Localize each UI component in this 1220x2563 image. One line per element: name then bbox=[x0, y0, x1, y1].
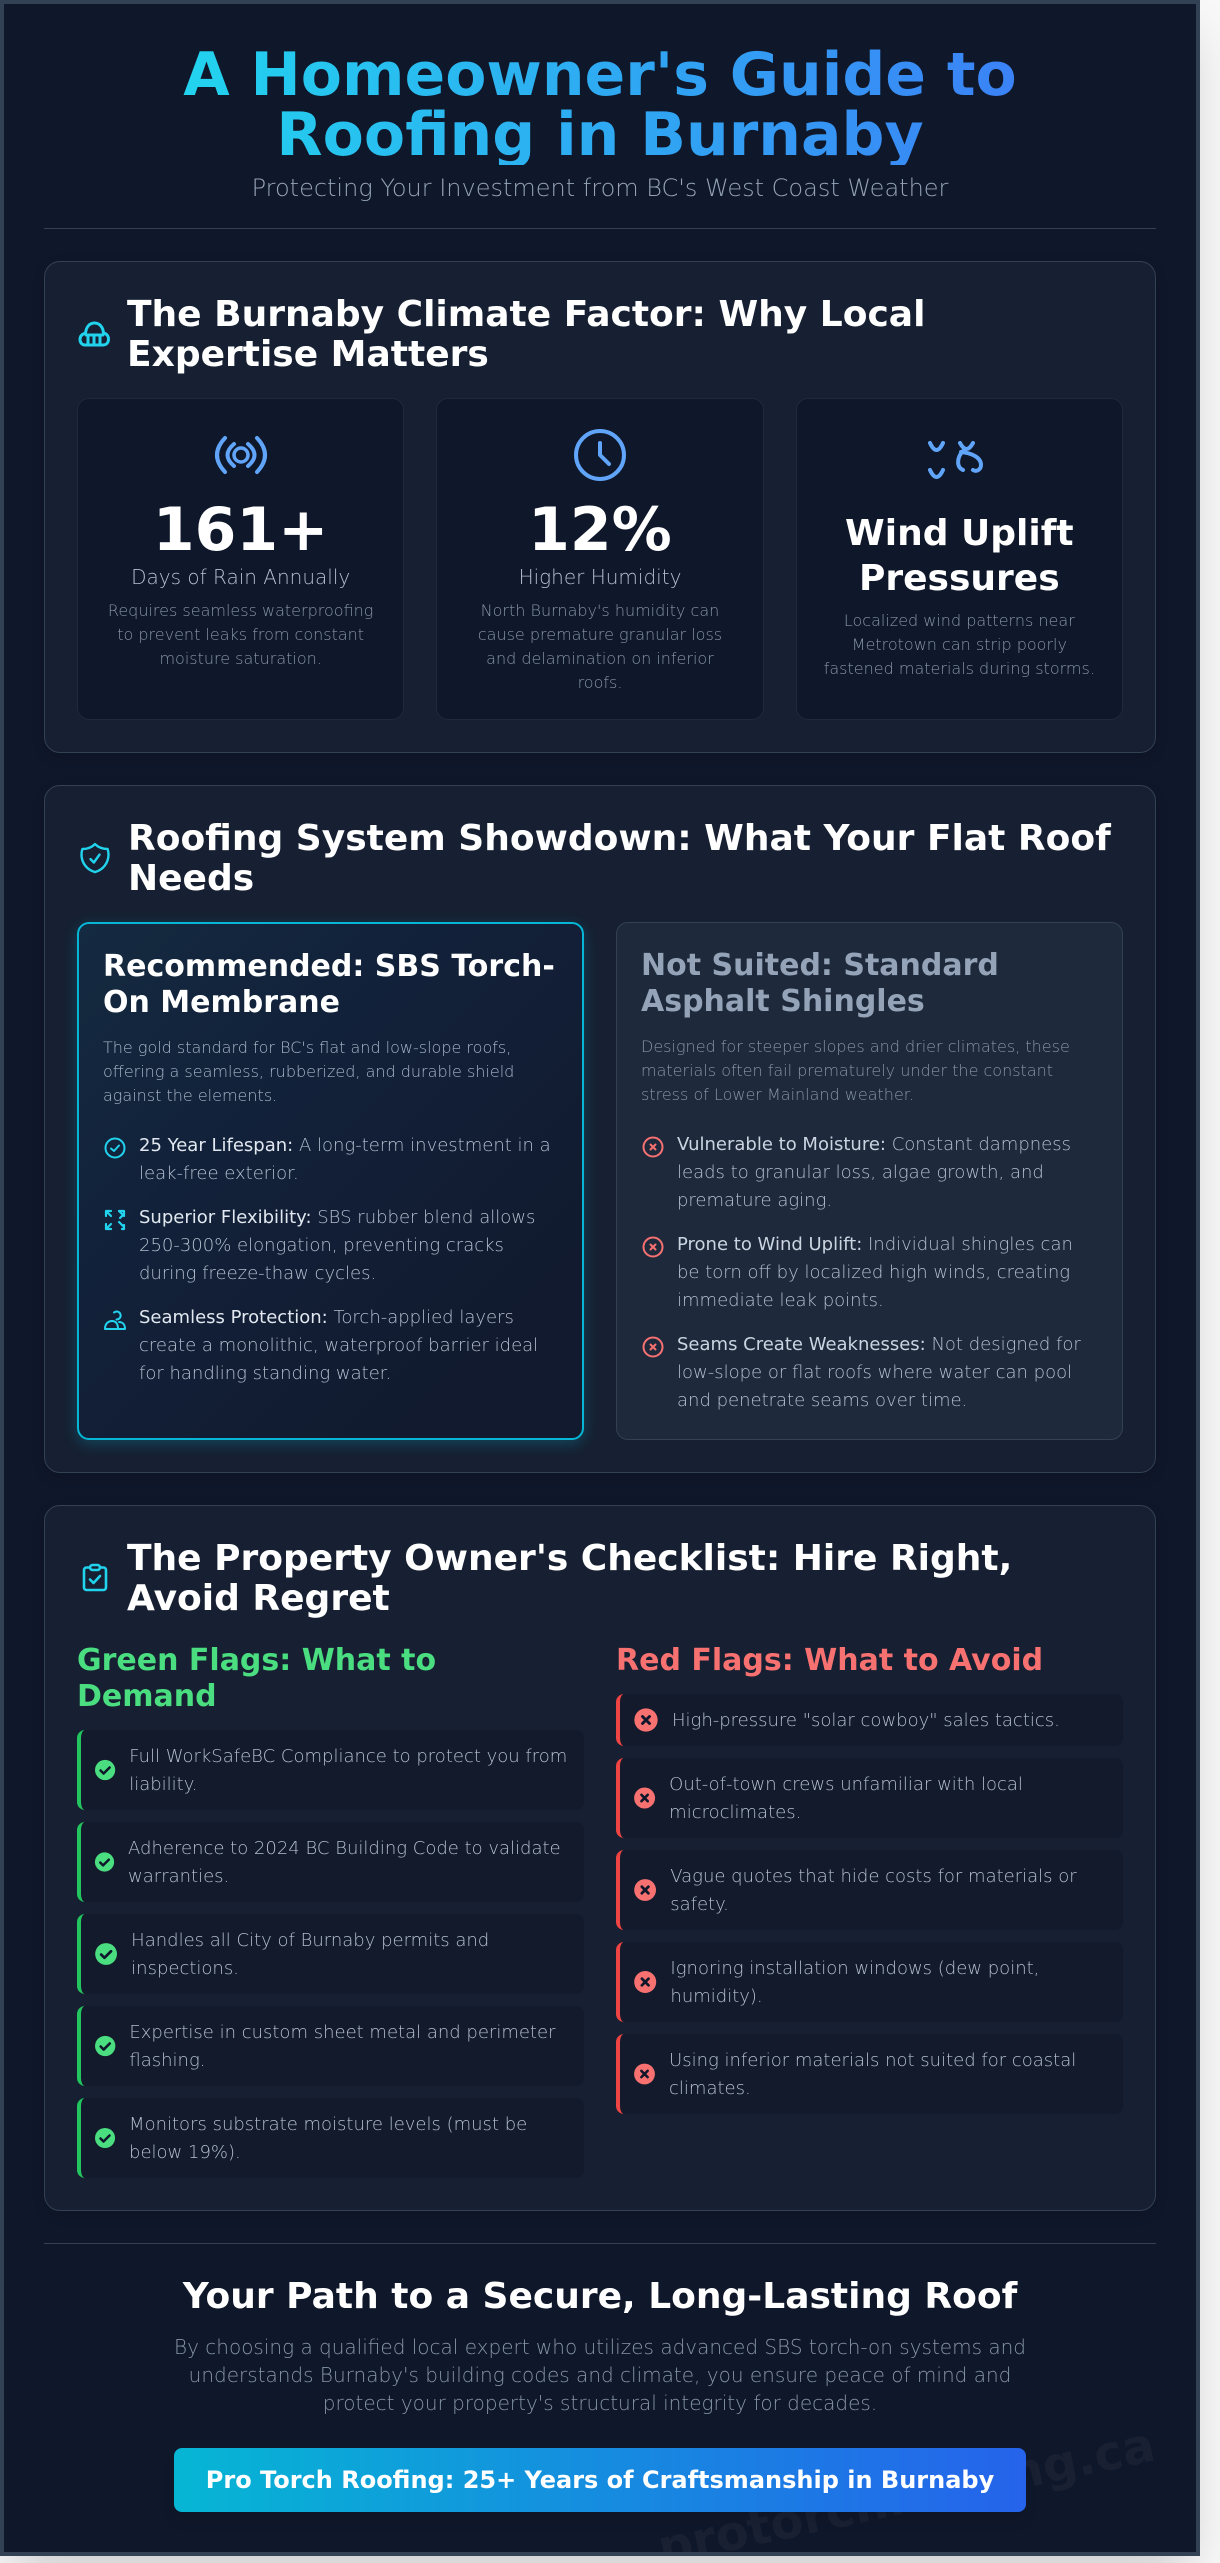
card description: Designed for steeper slopes and drier climates, these bbox=[641, 1037, 1070, 1056]
footer paragraph bbox=[174, 2335, 1026, 2415]
icon: signal bbox=[214, 436, 268, 474]
footer paragraph: protect your property's structural integrity for decades. bbox=[323, 2391, 877, 2415]
feature list bbox=[104, 1135, 551, 1384]
stat description: roofs. bbox=[578, 673, 622, 692]
stat value: 12% bbox=[528, 495, 672, 565]
section heading: climate bbox=[78, 294, 925, 375]
card: not suited bbox=[616, 922, 1123, 1440]
card description: materials often fail prematurely under the constant bbox=[641, 1061, 1053, 1080]
stat label: Days of Rain Annually bbox=[131, 565, 350, 589]
header bbox=[44, 44, 1156, 229]
feature: lifespan bbox=[104, 1135, 551, 1184]
card heading: Not Suited: Standard bbox=[641, 948, 999, 983]
drawback: seams: Seams Create Weaknesses: Not designed for bbox=[677, 1334, 1081, 1355]
drawback: wind: be torn off by localized high winds, creating bbox=[677, 1262, 1070, 1283]
footer bbox=[44, 2243, 1156, 2512]
stat description bbox=[478, 601, 722, 692]
stat card: wind bbox=[796, 398, 1123, 720]
title: Roofing in Burnaby bbox=[276, 100, 924, 170]
column: red flags bbox=[616, 1643, 1077, 2114]
drawback: moisture: Vulnerable to Moisture: Constant dampness bbox=[677, 1134, 1071, 1155]
heading text: Needs bbox=[128, 858, 254, 899]
stat value: 161+ bbox=[153, 495, 328, 565]
card description: against the elements. bbox=[103, 1086, 277, 1105]
title: A Homeowner's Guide to bbox=[183, 40, 1017, 110]
feature: flexibility: Superior Flexibility: SBS rubber blend allows bbox=[139, 1207, 535, 1228]
panel: checklist bbox=[44, 1505, 1156, 2211]
feature: seamless: create a monolithic, waterproof barrier ideal bbox=[139, 1335, 538, 1356]
call to action button bbox=[174, 2448, 1026, 2512]
flag columns bbox=[77, 1643, 1077, 2178]
feature: lifespan: leak-free exterior. bbox=[139, 1163, 299, 1184]
feature: seamless: Seamless Protection: Torch-applied layers bbox=[139, 1307, 514, 1328]
stat card: humidity bbox=[436, 398, 764, 720]
green item: Handles all City of Burnaby permits and inspections. bbox=[131, 1930, 489, 1979]
stat description: moisture saturation. bbox=[159, 649, 322, 668]
stat description: to prevent leaks from constant bbox=[117, 625, 364, 644]
stat card: rain bbox=[77, 398, 404, 720]
card heading: On Membrane bbox=[103, 985, 340, 1020]
stat description bbox=[108, 601, 373, 668]
red item bbox=[616, 1850, 1123, 1930]
card description bbox=[103, 1038, 514, 1105]
stat description: cause premature granular loss bbox=[478, 625, 722, 644]
drawback: seams bbox=[642, 1334, 1081, 1411]
drawback: moisture bbox=[642, 1134, 1071, 1211]
heading text bbox=[128, 818, 1112, 899]
heading text: The Property Owner's Checklist: Hire Right, bbox=[127, 1538, 1012, 1579]
heading text: The Burnaby Climate Factor: Why Local bbox=[127, 294, 925, 335]
heading text: Expertise Matters bbox=[127, 334, 489, 375]
red item: Using inferior materials not suited for coastal climates. bbox=[669, 2050, 1076, 2099]
stat description: North Burnaby's humidity can bbox=[481, 601, 719, 620]
red item bbox=[616, 1694, 1123, 1746]
red item: Ignoring installation windows (dew point, humidity). bbox=[670, 1958, 1039, 2007]
card description: The gold standard for BC's flat and low-slope roofs, bbox=[103, 1038, 511, 1057]
feature: lifespan: 25 Year Lifespan: A long-term investment in a bbox=[139, 1135, 551, 1156]
red item bbox=[616, 1758, 1123, 1838]
icon: wind bbox=[928, 440, 983, 479]
green item: Adherence to 2024 BC Building Code to validate warranties. bbox=[128, 1838, 561, 1887]
stat description: fastened materials during storms. bbox=[824, 659, 1095, 678]
stat description: Requires seamless waterproofing bbox=[108, 601, 373, 620]
red item bbox=[616, 1942, 1123, 2022]
call to action button: Pro Torch Roofing: 25+ Years of Craftsmanship in Burnaby bbox=[206, 2466, 994, 2494]
green item: Full WorkSafeBC Compliance to protect you from liability. bbox=[129, 1746, 567, 1795]
stat value bbox=[845, 513, 1074, 599]
red heading: Red Flags: What to Avoid bbox=[616, 1643, 1043, 1678]
stat label: Higher Humidity bbox=[519, 565, 681, 589]
green heading: Green Flags: What to Demand bbox=[77, 1643, 436, 1714]
card description: stress of Lower Mainland weather. bbox=[641, 1085, 914, 1104]
card heading bbox=[641, 948, 999, 1019]
panel: roofing showdown bbox=[44, 785, 1156, 1473]
green item bbox=[77, 1822, 584, 1902]
stat description: Localized wind patterns near bbox=[844, 611, 1075, 630]
stat description bbox=[824, 611, 1095, 678]
stat description: and delamination on inferior bbox=[486, 649, 714, 668]
feature: seamless bbox=[104, 1307, 538, 1384]
heading text bbox=[127, 1538, 1012, 1619]
red item bbox=[616, 2034, 1123, 2114]
feature: seamless: for handling standing water. bbox=[139, 1363, 391, 1384]
card description: offering a seamless, rubberized, and durable shield bbox=[103, 1062, 514, 1081]
subtitle: Protecting Your Investment from BC's West Coast Weather bbox=[252, 174, 948, 202]
drawback: wind bbox=[642, 1234, 1073, 1311]
heading text: Avoid Regret bbox=[127, 1578, 390, 1619]
stat value: Pressures bbox=[859, 558, 1060, 599]
card description bbox=[641, 1037, 1070, 1104]
feature: flexibility: during freeze-thaw cycles. bbox=[139, 1263, 376, 1284]
drawback list bbox=[642, 1134, 1081, 1411]
card heading: Asphalt Shingles bbox=[641, 984, 925, 1019]
drawback: wind: immediate leak points. bbox=[677, 1290, 884, 1311]
green item: Expertise in custom sheet metal and perimeter flashing. bbox=[129, 2022, 555, 2071]
footer paragraph: understands Burnaby's building codes and climate, you ensure peace of mind and bbox=[189, 2363, 1011, 2387]
card heading bbox=[103, 949, 555, 1020]
drawback: seams: low-slope or flat roofs where water can pool bbox=[677, 1362, 1072, 1383]
heading text bbox=[127, 294, 925, 375]
feature: flexibility: 250-300% elongation, preventing cracks bbox=[139, 1235, 504, 1256]
icon: clock bbox=[574, 429, 626, 481]
card heading: Recommended: SBS Torch- bbox=[103, 949, 555, 984]
heading text: Roofing System Showdown: What Your Flat Roof bbox=[128, 818, 1111, 859]
panel: climate factor bbox=[44, 261, 1156, 753]
title bbox=[182, 45, 1018, 165]
card: recommended bbox=[77, 922, 584, 1440]
stat cards bbox=[77, 398, 1123, 720]
drawback: wind: Prone to Wind Uplift: Individual shingles can bbox=[677, 1234, 1073, 1255]
footer paragraph: By choosing a qualified local expert who utilizes advanced SBS torch-on systems and bbox=[174, 2335, 1026, 2359]
green item bbox=[77, 2098, 584, 2178]
green item: Monitors substrate moisture levels (must be below 19%). bbox=[129, 2114, 527, 2163]
icon: shield bbox=[80, 842, 110, 874]
footer heading: Your Path to a Secure, Long-Lasting Roof bbox=[183, 2276, 1017, 2317]
green item bbox=[77, 2006, 584, 2086]
green item bbox=[77, 1914, 584, 1994]
red item: Out-of-town crews unfamiliar with local microclimates. bbox=[669, 1774, 1023, 1823]
drawback: seams: and penetrate seams over time. bbox=[677, 1390, 967, 1411]
icon: clipboard bbox=[82, 1564, 108, 1592]
drawback: moisture: leads to granular loss, algae growth, and bbox=[677, 1162, 1044, 1183]
drawback: moisture: premature aging. bbox=[677, 1190, 832, 1211]
red item: Vague quotes that hide costs for materials or safety. bbox=[670, 1866, 1077, 1915]
green item bbox=[77, 1730, 584, 1810]
icon: cloud bbox=[78, 322, 110, 346]
column: green flags bbox=[77, 1643, 567, 2178]
section heading: checklist bbox=[82, 1538, 1012, 1619]
comparison cards bbox=[72, 920, 1123, 1450]
stat value: Wind Uplift bbox=[845, 513, 1074, 554]
red item: High-pressure "solar cowboy" sales tactics. bbox=[672, 1710, 1060, 1731]
stat description: Metrotown can strip poorly bbox=[852, 635, 1067, 654]
section heading: showdown bbox=[80, 818, 1112, 899]
feature: flexibility bbox=[104, 1207, 535, 1284]
